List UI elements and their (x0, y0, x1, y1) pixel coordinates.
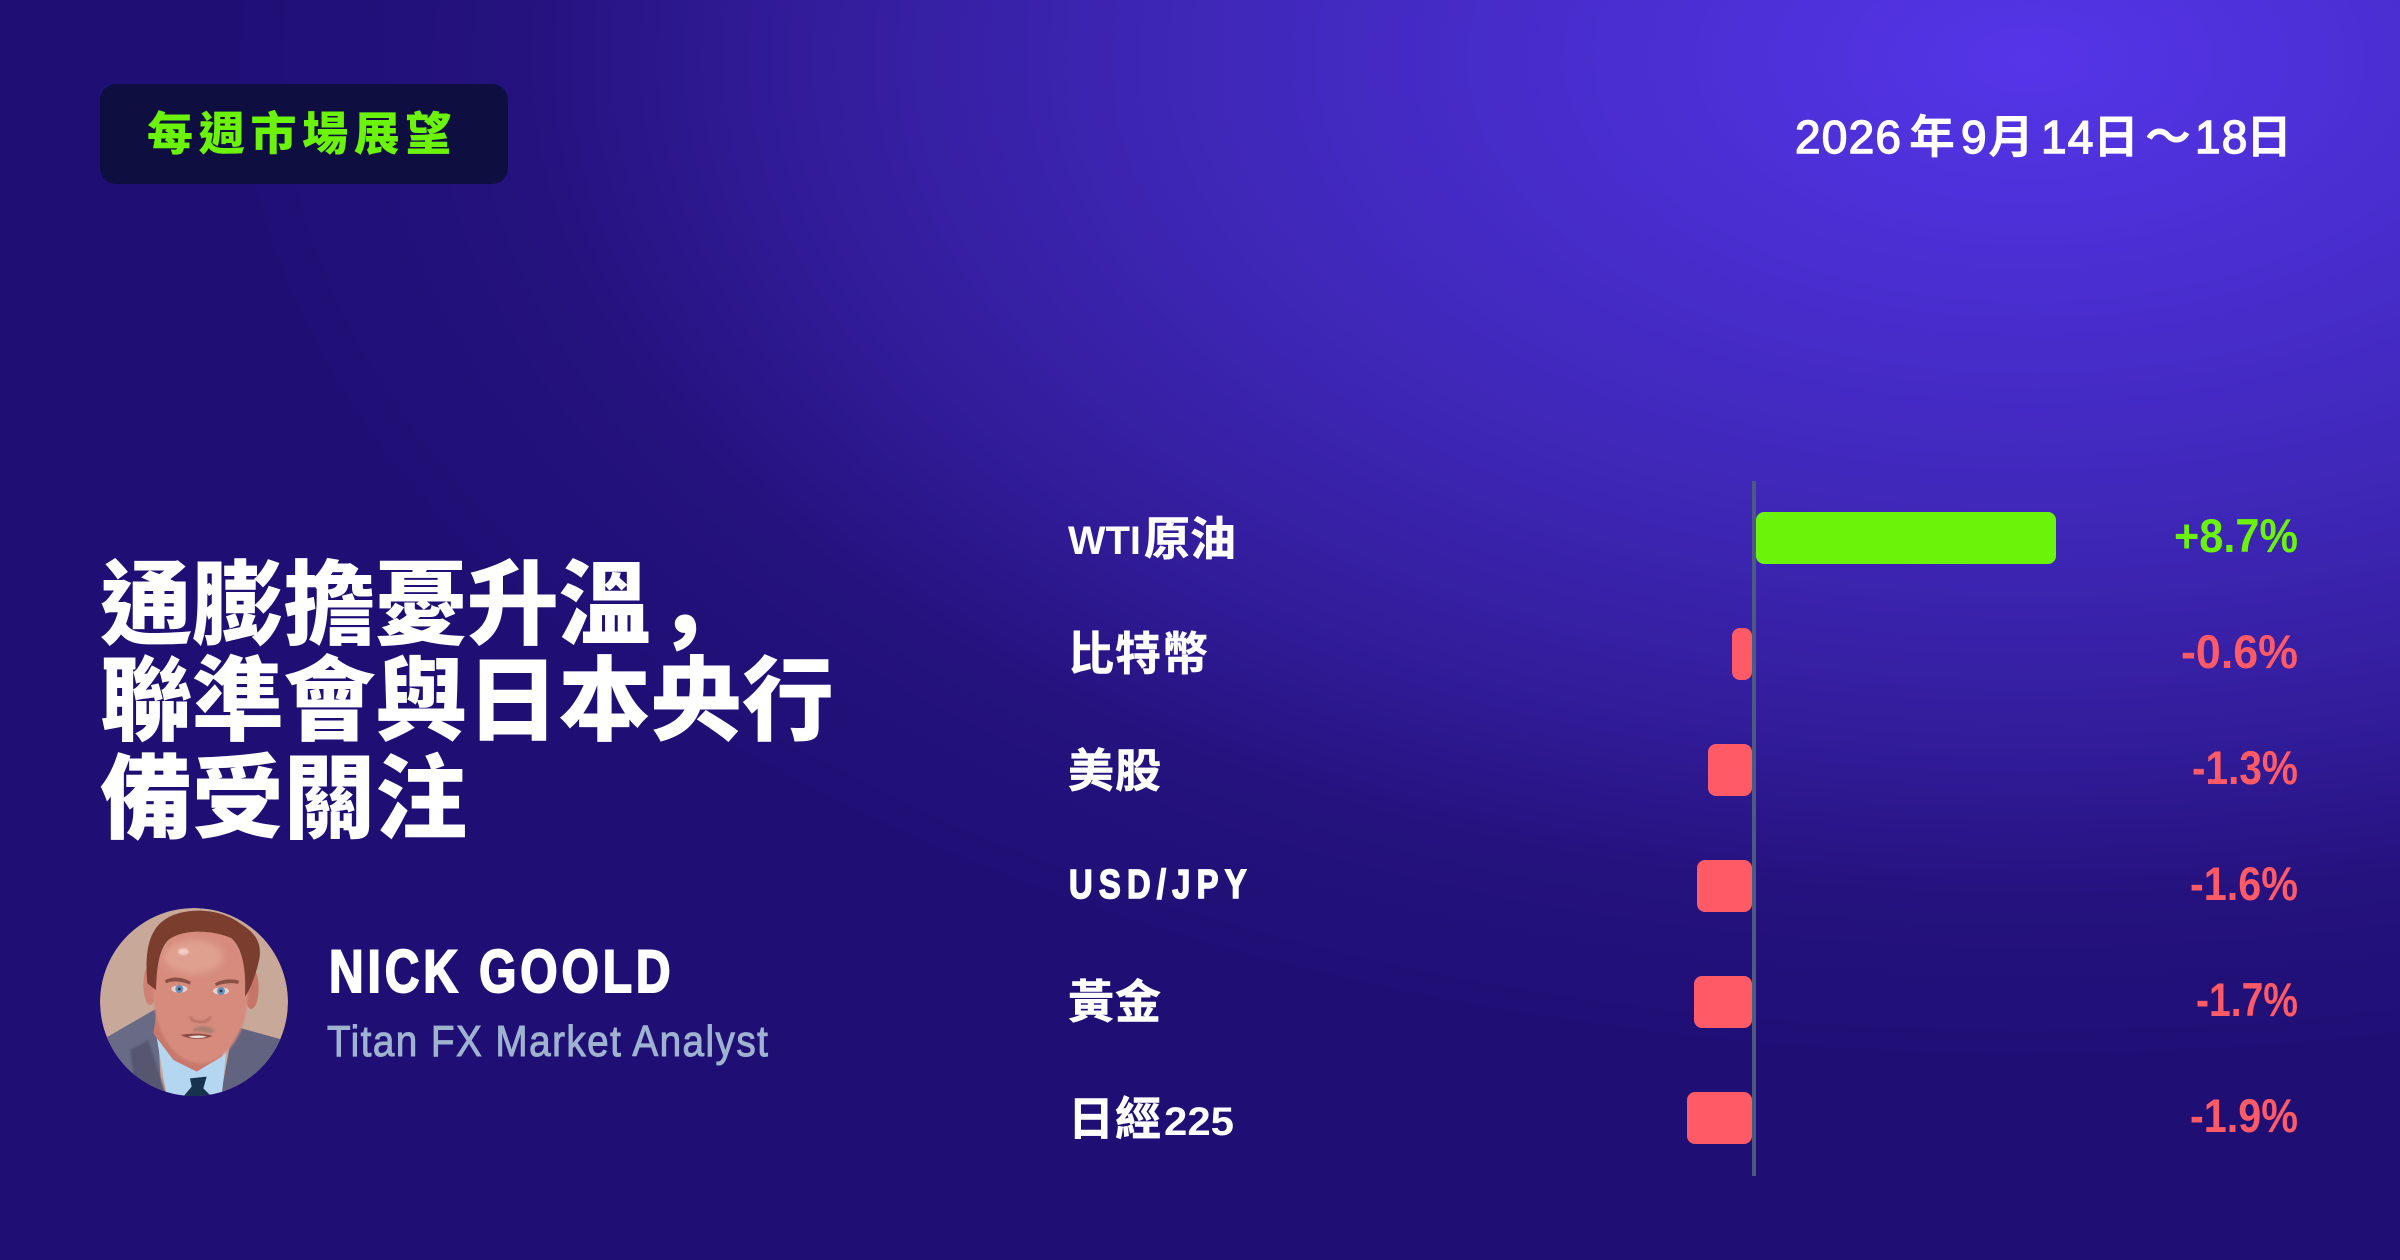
analyst role: Titan FX Market Analyst (327, 1016, 768, 1066)
row: Nikkei 225: 225 (1164, 1100, 1234, 1144)
date range: 2026 (1795, 111, 1902, 163)
badge: weekly market outlook: 每週市場展望 (147, 108, 457, 160)
row: US equities: -1.3% (2192, 741, 2298, 794)
row: Bitcoin (1068, 625, 2298, 680)
row: Nikkei 225 (1068, 1089, 2298, 1145)
date range: 日 (2246, 111, 2292, 163)
row: US equities (1068, 741, 2298, 797)
title: ， (657, 531, 749, 664)
badge: weekly market outlook (100, 84, 508, 184)
axis line (1752, 481, 1756, 1176)
row: Nikkei 225: -1.9% (2190, 1089, 2298, 1142)
title: 通膨擔憂升溫 (100, 555, 650, 657)
date range: ～ (2145, 111, 2191, 163)
date range: 9 (1961, 111, 1987, 163)
bar chart: weekly performance (1068, 481, 2298, 1176)
icon: analyst portrait (100, 908, 288, 1100)
row: Nikkei 225: 日經 (1068, 1093, 1162, 1145)
title (100, 531, 834, 851)
row: gold: 黃金 (1068, 976, 1162, 1028)
row: WTI crude oil: 原油 (1144, 513, 1236, 565)
date range: 年 (1909, 111, 1955, 163)
date range: 18 (2195, 111, 2249, 163)
row: gold: -1.7% (2196, 973, 2298, 1026)
row: WTI crude oil: WTI (1068, 519, 1141, 563)
row: WTI crude oil (1068, 509, 2298, 565)
title: 聯準會與日本央行 (100, 651, 834, 753)
row: US equities: 美股 (1068, 745, 1162, 797)
row: USD/JPY: USD/JPY (1069, 860, 1247, 907)
date range: 月 (1988, 111, 2034, 163)
analyst name: NICK GOOLD (329, 938, 671, 1005)
date range (1795, 111, 2292, 163)
row: gold (1068, 973, 2298, 1028)
row: WTI crude oil: +8.7% (2174, 509, 2298, 562)
date range: 14 (2041, 111, 2095, 163)
row: USD/JPY (1069, 857, 2298, 912)
date range: 日 (2093, 111, 2139, 163)
row: Bitcoin: 比特幣 (1068, 628, 1209, 680)
title: 備受關注 (100, 749, 467, 851)
row: USD/JPY: -1.6% (2190, 857, 2298, 910)
row: Bitcoin: -0.6% (2181, 625, 2298, 678)
